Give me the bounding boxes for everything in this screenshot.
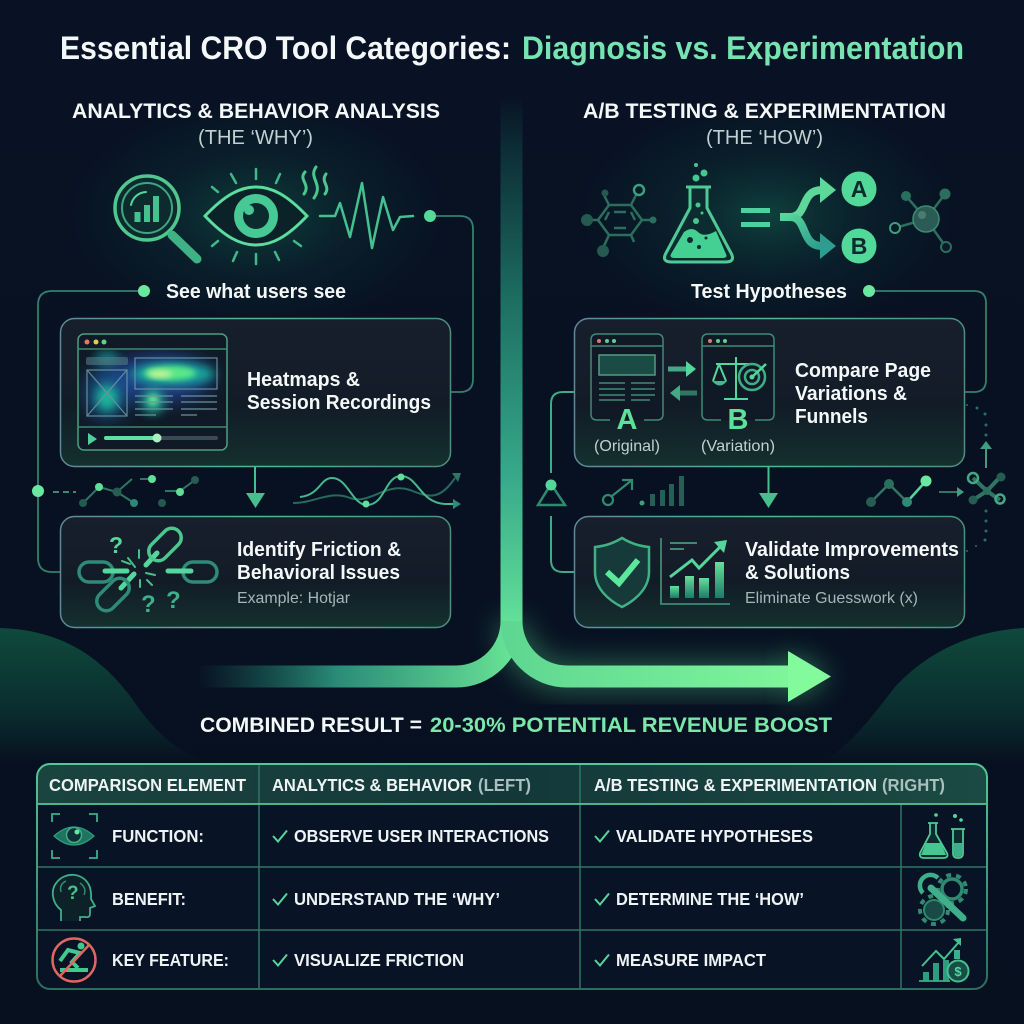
title: Essential CRO Tool Categories: bbox=[60, 30, 511, 66]
left column heading bbox=[72, 100, 440, 149]
row: key feature: KEY FEATURE: bbox=[112, 950, 229, 970]
row: function: OBSERVE USER INTERACTIONS bbox=[294, 826, 549, 846]
decoration: dotted network left bbox=[53, 475, 199, 507]
connector: test hypotheses to compare panel bbox=[863, 285, 986, 392]
panel: heatmaps bbox=[60, 318, 450, 466]
icon: growth chart bbox=[661, 538, 730, 604]
text: compare page variations: Funnels bbox=[795, 406, 868, 428]
text: validate improvements: Validate Improvements bbox=[745, 539, 959, 561]
text: identify friction: Example: Hotjar bbox=[237, 590, 351, 607]
window A: A bbox=[617, 404, 638, 436]
text: compare page variations: Variations & bbox=[795, 383, 907, 405]
text: compare page variations bbox=[795, 360, 931, 428]
icon: hexagon molecule bbox=[581, 185, 656, 257]
connector: see what users see to friction panel bbox=[32, 285, 150, 572]
icon: triangle node bbox=[538, 480, 565, 505]
text: heatmaps and session recordings bbox=[247, 369, 431, 414]
icon: small bar chart bbox=[640, 476, 684, 506]
icon: atom molecule bbox=[890, 188, 951, 252]
icon: head with question mark: ? bbox=[67, 883, 79, 904]
window B bbox=[701, 334, 775, 455]
text: heatmaps and session recordings: Session Recordings bbox=[247, 392, 431, 414]
combined result headline: COMBINED RESULT = bbox=[200, 713, 422, 737]
panel: compare variations bbox=[574, 318, 964, 466]
left column heading: ANALYTICS & BEHAVIOR ANALYSIS bbox=[72, 100, 440, 123]
arrow: combined result bbox=[512, 621, 831, 702]
text: heatmaps and session recordings: Heatmaps & bbox=[247, 369, 360, 391]
icon: magnifier with bar chart bbox=[115, 176, 197, 259]
title bbox=[60, 30, 964, 66]
row: key feature: VISUALIZE FRICTION bbox=[294, 950, 464, 970]
right column heading: (THE ‘HOW’) bbox=[706, 127, 823, 149]
connector: pulse to heatmap panel bbox=[424, 210, 473, 392]
row: benefit bbox=[53, 875, 966, 924]
icon: no running sign bbox=[52, 938, 96, 982]
window A: (Original) bbox=[594, 438, 660, 455]
icon: fork to A and B bbox=[780, 172, 876, 264]
icon: pulse line bbox=[320, 183, 413, 248]
decoration: dotted trail and up arrow bbox=[966, 404, 992, 552]
text: validate improvements: & Solutions bbox=[745, 562, 850, 584]
panel: validate improvements bbox=[574, 516, 964, 628]
combined result headline bbox=[200, 713, 832, 737]
text: compare page variations: Compare Page bbox=[795, 360, 931, 382]
icon: equals sign bbox=[741, 208, 770, 227]
right column heading bbox=[583, 100, 946, 149]
window B: (Variation) bbox=[701, 438, 775, 455]
row: function: FUNCTION: bbox=[112, 826, 204, 846]
table header row: ANALYTICS & BEHAVIOR bbox=[272, 775, 472, 795]
icon: broken chain: ? bbox=[166, 587, 181, 614]
icon: broken chain bbox=[79, 524, 217, 618]
icon: head with question mark bbox=[53, 875, 95, 921]
arrow: heatmaps to friction bbox=[246, 467, 265, 508]
row: benefit: BENEFIT: bbox=[112, 889, 186, 909]
combined result headline: 20-30% POTENTIAL REVENUE BOOST bbox=[430, 713, 832, 737]
icon: small line chart bbox=[866, 476, 964, 507]
central flow: stem splitting into two branches bbox=[200, 95, 831, 702]
table header row bbox=[37, 764, 987, 804]
icon: heat squiggles bbox=[303, 167, 327, 198]
decoration: trend waves left bbox=[293, 473, 461, 509]
label: see what users see: See what users see bbox=[166, 281, 346, 303]
text: identify friction: Behavioral Issues bbox=[237, 562, 400, 584]
row: function bbox=[52, 813, 965, 858]
icon: eye with rays bbox=[205, 169, 307, 264]
row: key feature: MEASURE IMPACT bbox=[616, 950, 766, 970]
icon: flask and test tube bbox=[920, 813, 965, 858]
icon: growth chart with dollar coin: $ bbox=[954, 964, 962, 979]
right column heading: A/B TESTING & EXPERIMENTATION bbox=[583, 100, 946, 123]
row: benefit: UNDERSTAND THE ‘WHY’ bbox=[294, 889, 500, 909]
connector: compare panel to validate panel bbox=[538, 392, 574, 572]
icon: small network bbox=[968, 472, 1006, 504]
row: key feature bbox=[52, 938, 968, 982]
text: identify friction: Identify Friction & bbox=[237, 539, 401, 561]
hill: bottom left bbox=[0, 628, 205, 762]
title: Diagnosis vs. Experimentation bbox=[522, 30, 964, 66]
window B: B bbox=[728, 404, 748, 436]
table header row: (LEFT) bbox=[478, 775, 531, 795]
row: function: VALIDATE HYPOTHESES bbox=[616, 826, 813, 846]
icon: browser with heatmap bbox=[78, 334, 227, 450]
panel: friction bbox=[60, 516, 450, 628]
icon: eye in focus frame bbox=[52, 814, 97, 858]
icon: broken chain: ? bbox=[109, 532, 123, 558]
icon: shield with check bbox=[595, 538, 649, 607]
table header row: (RIGHT) bbox=[882, 775, 945, 795]
text: validate improvements bbox=[745, 539, 959, 607]
label: test hypotheses: Test Hypotheses bbox=[691, 281, 847, 303]
badge: A: A bbox=[851, 176, 867, 202]
hill: bottom right bbox=[825, 628, 1024, 762]
arrows: exchange between A and B bbox=[668, 361, 697, 401]
icon: small growth arrow bbox=[603, 480, 632, 505]
icon: broken chain: ? bbox=[141, 591, 156, 618]
badge: B: B bbox=[851, 233, 867, 259]
text: validate improvements: Eliminate Guesswork (x) bbox=[745, 590, 918, 607]
left column heading: (THE ‘WHY’) bbox=[198, 127, 313, 149]
window A bbox=[591, 334, 663, 455]
arrow: compare to validate bbox=[759, 467, 778, 508]
text: identify friction bbox=[237, 539, 401, 607]
icon: wrench and gears bbox=[920, 875, 966, 924]
icon: flask bbox=[664, 163, 733, 262]
row: benefit: DETERMINE THE ‘HOW’ bbox=[616, 889, 804, 909]
comparison table bbox=[37, 764, 987, 989]
table header row: COMPARISON ELEMENT bbox=[49, 775, 246, 795]
table header row: A/B TESTING & EXPERIMENTATION bbox=[594, 775, 877, 795]
icon: growth chart with dollar coin bbox=[919, 938, 968, 982]
